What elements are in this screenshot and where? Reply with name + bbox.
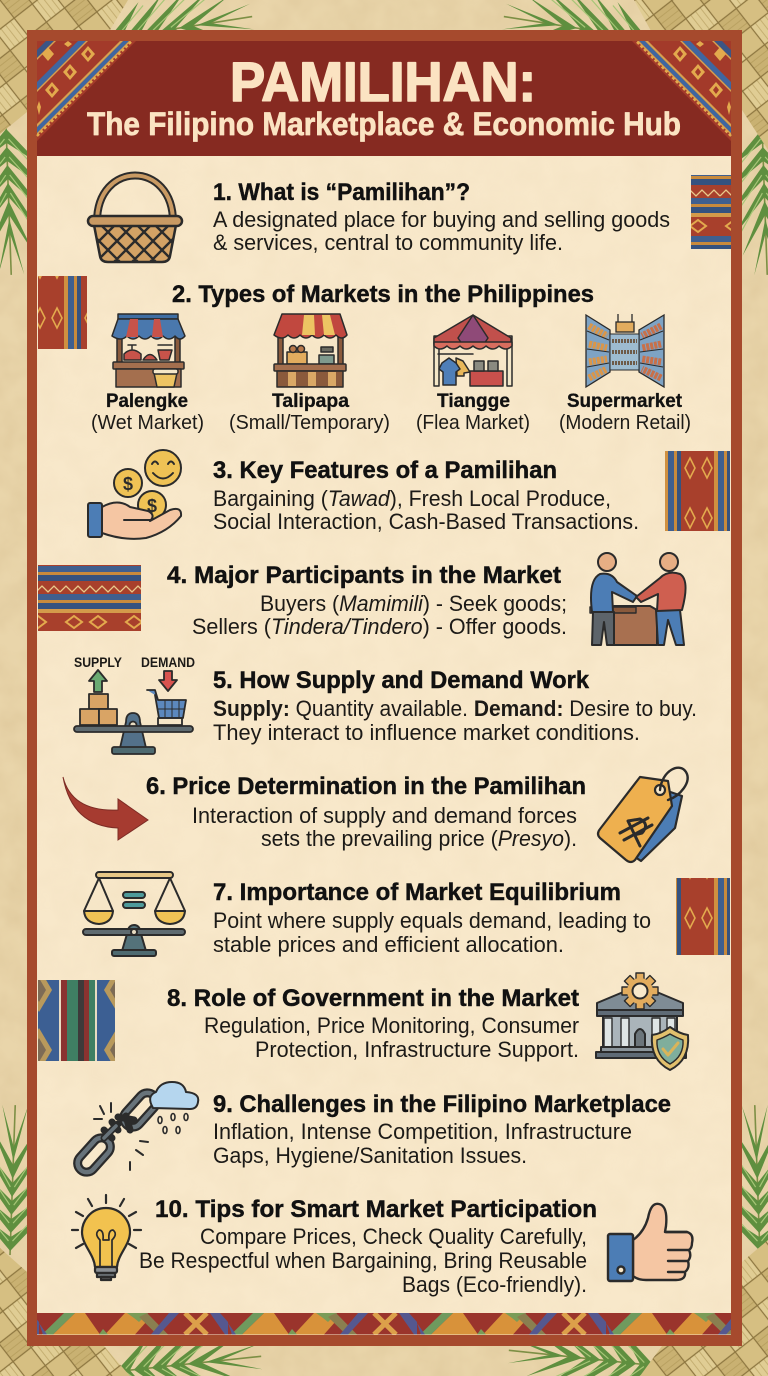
icon: supply demand seesaw bbox=[74, 655, 195, 754]
swatch 1 bbox=[691, 175, 731, 249]
body 10: Compare Prices, Check Quality Carefully, bbox=[200, 1224, 587, 1249]
body 5 bbox=[213, 696, 697, 745]
icon: aisle supermarket bbox=[586, 314, 664, 387]
icon: basket bbox=[86, 172, 184, 264]
icon: stall palengke bbox=[112, 314, 185, 387]
heading 1: 1. What is “Pamilihan”? bbox=[213, 179, 470, 206]
section 8: role of government bbox=[167, 973, 688, 1070]
textile swatches bbox=[38, 175, 731, 1061]
body 10: Be Respectful when Bargaining, Bring Reusable bbox=[139, 1248, 587, 1273]
market: talipapa bbox=[229, 314, 390, 434]
section 10: tips bbox=[72, 1195, 692, 1297]
icon: hand with coins: $ bbox=[147, 496, 157, 516]
heading 8: 8. Role of Government in the Market bbox=[167, 985, 579, 1012]
section 3: key features bbox=[88, 450, 639, 539]
section 1: what is pamilihan bbox=[72, 176, 670, 268]
heading 3: 3. Key Features of a Pamilihan bbox=[213, 457, 557, 484]
section 2: types of markets bbox=[91, 281, 691, 434]
icon: government building bbox=[596, 973, 688, 1070]
icon: price tag bbox=[598, 768, 688, 862]
icon: hand with coins bbox=[88, 450, 181, 539]
demand label: DEMAND bbox=[141, 655, 195, 670]
heading 10: 10. Tips for Smart Market Participation bbox=[155, 1196, 597, 1223]
swatch 3 bbox=[665, 451, 730, 531]
section 7: market equilibrium bbox=[83, 872, 651, 957]
body 10: Bags (Eco-friendly). bbox=[402, 1272, 587, 1297]
section 5: supply and demand bbox=[74, 655, 697, 754]
label palengke: Palengke bbox=[106, 391, 188, 412]
body 9: Gaps, Hygiene/Sanitation Issues. bbox=[213, 1143, 527, 1168]
sublabel tiangge: (Flea Market) bbox=[416, 411, 530, 434]
body 8 bbox=[204, 1013, 579, 1062]
label talipapa: Talipapa bbox=[272, 391, 349, 412]
icon: balance scale bbox=[83, 872, 185, 956]
body 1: A designated place for buying and selling goods bbox=[213, 207, 670, 232]
header textile left bbox=[37, 41, 136, 141]
body 1: & services, central to community life. bbox=[213, 230, 563, 255]
body 3 bbox=[213, 486, 639, 534]
icon: broken chain and cloud bbox=[74, 1082, 198, 1176]
heading 2: 2. Types of Markets in the Philippines bbox=[172, 281, 594, 308]
body 6: Interaction of supply and demand forces bbox=[192, 803, 577, 828]
body 6 bbox=[192, 803, 577, 851]
icon: thumbs up bbox=[608, 1204, 692, 1281]
heading 5: 5. How Supply and Demand Work bbox=[213, 667, 589, 694]
heading 9: 9. Challenges in the Filipino Marketplace bbox=[213, 1091, 671, 1118]
swatch 7 bbox=[676, 878, 730, 955]
label supermarket: Supermarket bbox=[567, 391, 683, 412]
header banner bbox=[37, 41, 731, 156]
section 9: challenges bbox=[74, 1082, 671, 1176]
header textile right bbox=[632, 41, 731, 141]
sublabel supermarket: (Modern Retail) bbox=[559, 411, 691, 434]
body 5: They interact to influence market conditions. bbox=[213, 720, 640, 745]
swatch 8 bbox=[38, 980, 115, 1061]
body 5: Supply: Quantity available. Demand: Desire to buy. bbox=[213, 696, 697, 721]
body 8: Protection, Infrastructure Support. bbox=[255, 1037, 579, 1062]
body 4: Buyers (Mamimili) - Seek goods; bbox=[260, 591, 567, 616]
sublabel palengke: (Wet Market) bbox=[91, 411, 204, 434]
supply label: SUPPLY bbox=[74, 655, 122, 670]
icon: stall talipapa bbox=[274, 314, 347, 387]
title: PAMILIHAN: bbox=[230, 50, 536, 113]
body 9: Inflation, Intense Competition, Infrastructure bbox=[213, 1119, 632, 1144]
swatch 4 bbox=[38, 565, 141, 631]
heading 7: 7. Importance of Market Equilibrium bbox=[213, 879, 621, 906]
icon: hand with coins: $ bbox=[123, 474, 133, 494]
market: palengke bbox=[91, 314, 204, 434]
body 7: stable prices and efficient allocation. bbox=[213, 932, 564, 957]
body 4: Sellers (Tindera/Tindero) - Offer goods. bbox=[192, 614, 567, 639]
title bbox=[87, 50, 681, 142]
title: The Filipino Marketplace & Economic Hub bbox=[87, 106, 681, 142]
section 4: major participants bbox=[167, 553, 686, 645]
market: supermarket bbox=[559, 314, 691, 434]
icon: light bulb bbox=[72, 1195, 141, 1280]
body 10 bbox=[139, 1224, 587, 1297]
seesaw drawing bbox=[74, 670, 193, 754]
body 3: Social Interaction, Cash-Based Transactions. bbox=[213, 509, 639, 534]
swatch 2 bbox=[38, 276, 87, 349]
bottom textile band bbox=[37, 1313, 731, 1334]
body 7: Point where supply equals demand, leading to bbox=[213, 908, 651, 933]
body 1 bbox=[213, 207, 670, 255]
icon: handshake bbox=[590, 553, 686, 645]
market: tiangge bbox=[416, 315, 530, 434]
heading 6: 6. Price Determination in the Pamilihan bbox=[146, 773, 586, 800]
body 7 bbox=[213, 908, 651, 957]
icon: tent tiangge bbox=[434, 315, 512, 386]
sublabel talipapa: (Small/Temporary) bbox=[229, 411, 390, 434]
body 3: Bargaining (Tawad), Fresh Local Produce, bbox=[213, 486, 611, 511]
section 6: price determination bbox=[63, 768, 688, 862]
body 6: sets the prevailing price (Presyo). bbox=[261, 826, 577, 851]
label tiangge: Tiangge bbox=[437, 391, 510, 412]
body 9 bbox=[213, 1119, 632, 1168]
heading 4: 4. Major Participants in the Market bbox=[167, 562, 561, 589]
body 4 bbox=[192, 591, 567, 639]
icon: curved arrow bbox=[63, 777, 148, 840]
body 8: Regulation, Price Monitoring, Consumer bbox=[204, 1013, 579, 1038]
